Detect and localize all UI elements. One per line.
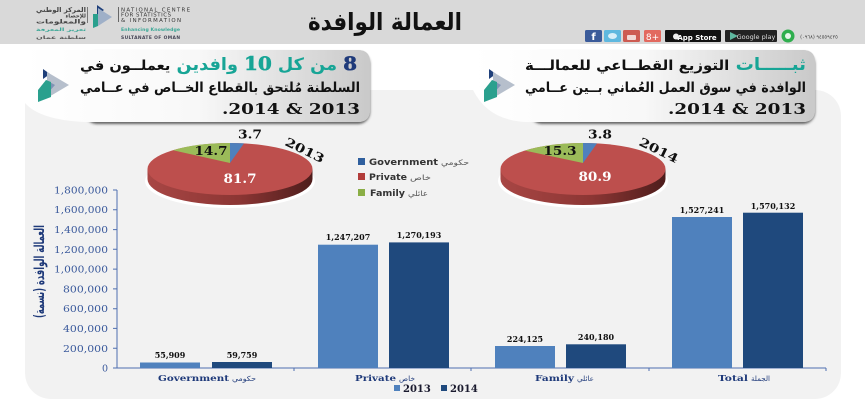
bars: Total xyxy=(672,201,803,384)
callout: stable sector distribution: ثبـــــات التوزيع القطــاعي للعمالـــة xyxy=(525,55,806,75)
logo: NCSI: NATIONAL CENTRE xyxy=(121,8,191,14)
bars: Government: Government xyxy=(158,374,229,384)
bars: Private: خاص xyxy=(399,375,415,383)
bars: Total: 1,527,241 xyxy=(680,205,724,215)
header band xyxy=(0,0,865,44)
bars: Private: Private xyxy=(355,374,397,384)
logo: NCSI: SULTANATE OF OMAN xyxy=(121,35,180,41)
social and app icons: Google play xyxy=(737,33,776,41)
pie legend: عائلي xyxy=(408,189,428,198)
bars: Total: Total xyxy=(718,374,749,384)
pie chart 2013: 2013 xyxy=(283,135,327,166)
pie legend: Private xyxy=(369,173,407,183)
pie chart 2014: 3.8 xyxy=(588,128,612,142)
y axis: 1,600,000 xyxy=(54,205,108,216)
social and app icons: (٠٩٦٨) ٩٤٥٥٩٤٢٥ xyxy=(800,34,838,40)
pie legend xyxy=(358,158,469,199)
logo: NCSI: المركز الوطني xyxy=(36,6,86,14)
bars: Private: 1,247,207 xyxy=(326,232,370,242)
logo: NCSI: سلطنة عمان xyxy=(36,36,87,41)
social and app icons: 8+ xyxy=(646,33,659,43)
y axis: 1,200,000 xyxy=(54,245,108,256)
pie legend: Family xyxy=(370,189,405,199)
social and app icons: App Store xyxy=(677,34,717,42)
pie legend: حكومي xyxy=(441,158,469,167)
pie chart 2014: 80.9 xyxy=(578,170,612,185)
social and app icons xyxy=(585,30,838,43)
callout: 8 of 10 expatriates: السلطنة مُلتحق بالقطاع الخــاص في عــامي xyxy=(80,80,360,96)
pie chart 2013: 81.7 xyxy=(224,172,256,187)
bars: Family: Family xyxy=(535,374,575,384)
logo: NCSI: FOR STATISTICS xyxy=(121,12,172,18)
main panel background xyxy=(25,90,841,399)
y axis: 1,800,000 xyxy=(54,186,108,196)
bars: Government: 55,909 xyxy=(155,350,186,360)
bars: Government: حكومي xyxy=(232,375,256,383)
bars: Total: 1,570,132 xyxy=(751,201,795,211)
y axis: 0 xyxy=(102,364,108,374)
y axis: 800,000 xyxy=(63,284,108,296)
y axis: 1,400,000 xyxy=(54,225,108,236)
pie legend: خاص xyxy=(410,173,431,182)
callout: stable sector distribution: 2013 & 2014. xyxy=(668,100,806,118)
pie chart 2013: 14.7 xyxy=(194,144,228,158)
y axis: 1,000,000 xyxy=(54,264,108,276)
pie chart 2014 xyxy=(498,128,681,208)
title: العمالة الوافدة xyxy=(308,8,462,36)
pie chart 2014: 2014 xyxy=(637,135,681,166)
pie chart 2014: 15.3 xyxy=(544,144,576,158)
bars: Private: 1,270,193 xyxy=(397,230,442,240)
bars: Government xyxy=(140,350,272,384)
y axis: 400,000 xyxy=(63,324,108,335)
bars: Government: 59,759 xyxy=(227,350,258,360)
callout: 8 of 10 expatriates xyxy=(25,50,370,122)
bars: Private xyxy=(318,230,449,384)
bars: Family xyxy=(495,332,626,384)
callout: 8 of 10 expatriates: 8 من كل 10 وافدين يعملــون في xyxy=(80,53,357,75)
logo: NCSI: للإحصاء xyxy=(65,14,86,20)
pie chart 2013 xyxy=(145,128,327,208)
y axis title: العمالة الوافدة (نسمة) xyxy=(32,225,48,318)
bar legend xyxy=(394,384,478,395)
logo: NCSI: والمعلومات xyxy=(36,18,86,26)
bars: Family: 224,125 xyxy=(507,334,543,344)
bar legend: 2014 xyxy=(450,384,478,395)
callout: 8 of 10 expatriates: 2013 & 2014. xyxy=(222,100,360,118)
social and app icons: f xyxy=(591,32,596,43)
bars: Family: 240,180 xyxy=(578,332,615,342)
logo: NCSI: تعزيز المعرفة xyxy=(36,28,86,33)
bars: Family: عائلي xyxy=(577,375,594,383)
bars: Total: الجملة xyxy=(751,375,770,383)
logo: NCSI: & INFORMATION xyxy=(121,18,181,24)
y axis: 600,000 xyxy=(63,304,108,315)
callout: stable sector distribution: الوافدة في سوق العمل العُماني بــين عــامي xyxy=(525,80,806,96)
y axis: 200,000 xyxy=(63,344,108,355)
bar chart xyxy=(32,186,826,395)
y axis xyxy=(54,186,826,374)
icon: callout logo right xyxy=(484,69,515,102)
pie chart 2013: 3.7 xyxy=(238,128,262,142)
bar legend: 2013 xyxy=(403,384,431,395)
callout: stable sector distribution xyxy=(473,50,815,122)
logo: NCSI xyxy=(36,5,191,41)
pie legend: Government xyxy=(369,158,439,168)
logo: NCSI: Enhancing Knowledge xyxy=(121,27,180,33)
icon: callout logo left xyxy=(38,69,69,102)
